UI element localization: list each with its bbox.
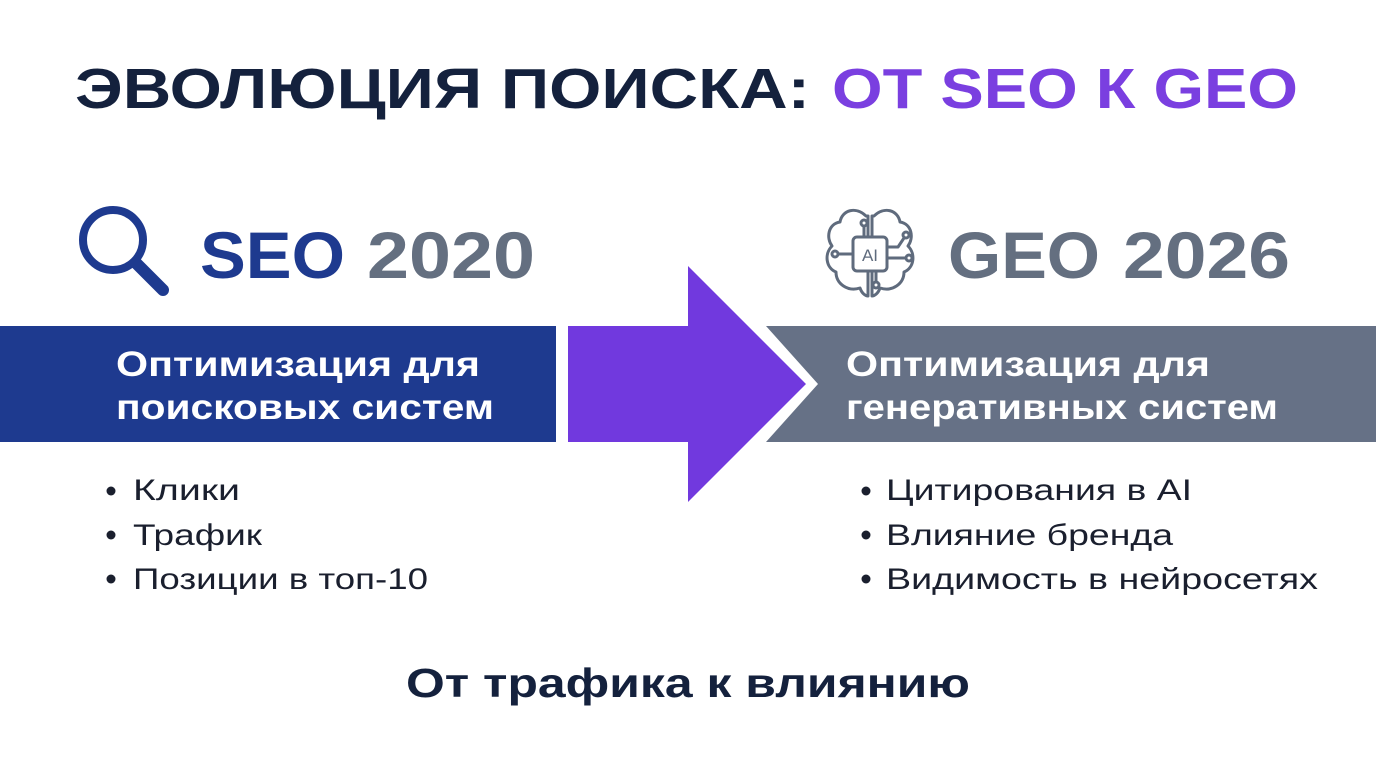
footer tagline: От трафика к влиянию (406, 660, 970, 706)
panel: SEO band: Оптимизация для (116, 345, 480, 384)
heading: GEO 2026 (948, 218, 1290, 292)
list: GEO metrics: Видимость в нейросетях (886, 563, 1318, 596)
list: SEO metrics: Позиции в топ-10 (133, 563, 428, 596)
title: ЭВОЛЮЦИЯ ПОИСКА: (75, 57, 810, 121)
panel: SEO band (0, 326, 556, 442)
panel: SEO band: поисковых систем (116, 388, 494, 427)
list: GEO metrics: Цитирования в AI (886, 474, 1192, 507)
panel: GEO band (766, 326, 1376, 442)
heading: SEO 2020: 2020 (367, 218, 535, 292)
list: GEO metrics: Влияние бренда (886, 519, 1173, 552)
icon: AI brain (827, 210, 913, 296)
list: SEO metrics: Клики (133, 474, 240, 507)
heading: GEO 2026: GEO (948, 218, 1100, 292)
list: GEO metrics (862, 474, 1318, 596)
panel: GEO band: Оптимизация для (846, 345, 1210, 384)
title: ОТ SEO К GEO (832, 57, 1298, 121)
list: SEO metrics (106, 474, 428, 596)
icon: AI brain: AI (862, 246, 878, 265)
arrow (568, 266, 806, 502)
panel: GEO band: генеративных систем (846, 388, 1278, 427)
title (75, 57, 1298, 121)
list: SEO metrics: Трафик (133, 519, 263, 552)
icon: magnifier (83, 210, 163, 290)
heading: GEO 2026: 2026 (1123, 218, 1290, 292)
heading: SEO 2020: SEO (200, 218, 345, 292)
heading: SEO 2020 (200, 218, 535, 292)
